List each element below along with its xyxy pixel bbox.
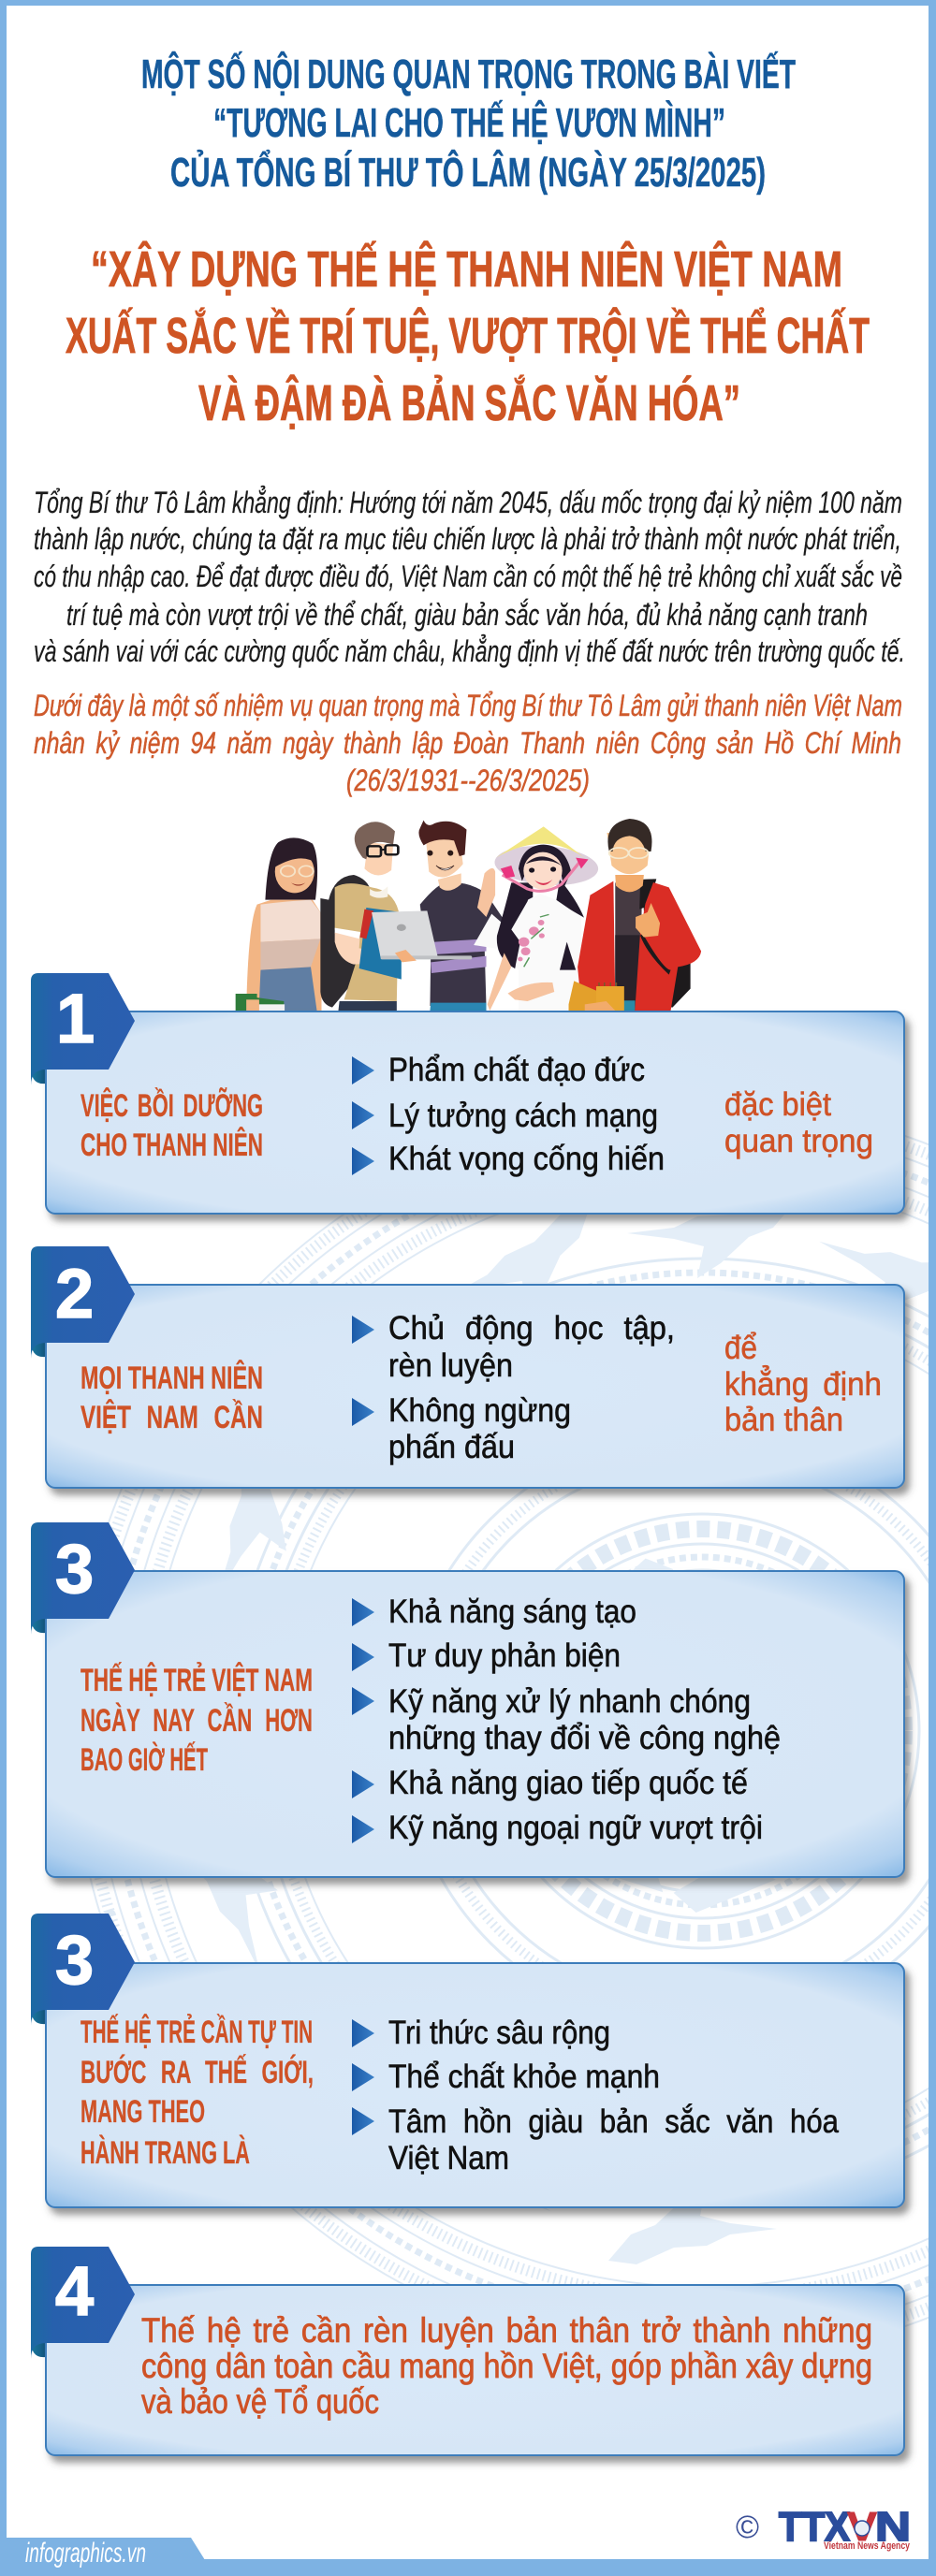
text block: orange italic lead-in: (26/3/1931--26/3/2025): [346, 764, 590, 797]
footer: copyright and TTXVN logo: N: [875, 2504, 911, 2550]
right label: bản thân: [724, 1402, 843, 1438]
bullet list: Lý tưởng cách mạng: [388, 1098, 658, 1134]
ribbon curl: [31, 2331, 46, 2357]
right label: khẳng định: [724, 1365, 882, 1403]
bullet list: [352, 2015, 839, 2176]
text block: orange italic lead-in: [34, 689, 902, 797]
background: bronze drum pattern: [73, 1102, 936, 2360]
number: 4: [55, 2252, 94, 2330]
footer: copyright and TTXVN logo: ©: [736, 2510, 759, 2545]
bullet list: Việt Nam: [388, 2140, 509, 2176]
left label: [80, 2015, 314, 2171]
number: 2: [55, 1255, 94, 1332]
right label: [724, 1330, 882, 1438]
left label: CHO THANH NIÊN: [80, 1128, 263, 1163]
footer: copyright and TTXVN logo: Vietnam News Agency: [824, 2540, 911, 2552]
bullet list: Khát vọng cống hiến: [388, 1141, 665, 1177]
heading: main quote: [66, 240, 870, 431]
panel box: [46, 1011, 904, 1214]
bullet list: rèn luyện: [388, 1347, 513, 1384]
number tab: [31, 973, 135, 1085]
bullet list: [352, 1594, 781, 1846]
bullet list: Kỹ năng ngoại ngữ vượt trội: [388, 1810, 763, 1846]
bullet list: Phẩm chất đạo đức: [388, 1052, 645, 1088]
panel 5: [31, 2247, 904, 2455]
left label: THẾ HỆ TRẺ CẦN TỰ TIN: [80, 2015, 313, 2050]
ribbon curl: [31, 1607, 46, 1633]
conclusion text: Thế hệ trẻ cần rèn luyện bản thân trở thành những: [141, 2311, 872, 2350]
person 2: [320, 822, 402, 1011]
number tab: [31, 2247, 135, 2359]
bullet list: Tri thức sâu rộng: [388, 2015, 610, 2051]
panel 2: [31, 1246, 904, 1488]
left label: MANG THEO: [80, 2094, 205, 2130]
laptop: [372, 910, 472, 962]
person 4: [474, 826, 600, 1011]
number tab: [31, 1522, 135, 1635]
bullet list: [352, 1310, 675, 1465]
number: 3: [55, 1921, 94, 1999]
left label: [80, 1663, 313, 1778]
bullet list: [352, 1052, 665, 1177]
panel 1: [31, 973, 904, 1214]
number: 3: [55, 1530, 94, 1608]
title: article summary: [141, 50, 796, 196]
footer: copyright and TTXVN logo: [736, 2504, 911, 2552]
right label: đặc biệt: [724, 1086, 831, 1123]
panel box: [46, 1571, 904, 1877]
left label: MỌI THANH NIÊN: [80, 1361, 263, 1396]
bullet list: Khả năng sáng tạo: [388, 1594, 636, 1630]
bullet list: phấn đấu: [388, 1429, 515, 1465]
left label: VIỆC BỒI DƯỠNG: [80, 1088, 263, 1124]
right label: quan trọng: [724, 1123, 873, 1159]
bullet list: Thể chất khỏe mạnh: [388, 2059, 660, 2095]
panel box: [46, 1285, 904, 1488]
illustration: five young people: [236, 819, 701, 1011]
ribbon curl: [31, 1998, 46, 2024]
left label: NGÀY NAY CẦN HƠN: [80, 1703, 313, 1739]
ribbon curl: [31, 1331, 46, 1357]
right label: [724, 1086, 873, 1159]
person 5: [569, 819, 701, 1011]
left label: BAO GIỜ HẾT: [80, 1742, 208, 1778]
left label: HÀNH TRANG LÀ: [80, 2135, 250, 2171]
bullet list: Chủ động học tập,: [388, 1310, 675, 1346]
left label: [80, 1088, 263, 1163]
footer: copyright and TTXVN logo: V: [847, 2504, 878, 2550]
left label: BƯỚC RA THẾ GIỚI,: [80, 2055, 314, 2090]
conclusion text: [141, 2311, 872, 2421]
panel box: [46, 1963, 904, 2207]
conclusion text: và bảo vệ Tổ quốc: [141, 2382, 379, 2421]
bullet list: Khả năng giao tiếp quốc tế: [388, 1765, 748, 1801]
panel box: [46, 2285, 904, 2455]
number tab: [31, 1914, 135, 2026]
number tab: [31, 1246, 135, 1359]
person 3: [418, 821, 505, 1011]
number: 1: [56, 980, 95, 1057]
panel 4: [31, 1914, 904, 2207]
text block: introduction: [34, 486, 905, 668]
bullet list: Tư duy phản biện: [388, 1637, 621, 1674]
ribbon curl: [31, 1057, 46, 1084]
panel 3: [31, 1522, 904, 1877]
left label: VIỆT NAM CẦN: [80, 1400, 263, 1435]
left label: [80, 1361, 263, 1435]
footer: copyright and TTXVN logo: TTX: [779, 2504, 850, 2550]
left label: THẾ HỆ TRẺ VIỆT NAM: [80, 1663, 313, 1698]
right label: để: [724, 1330, 757, 1366]
person 1: [236, 837, 321, 1011]
bullet list: Tâm hồn giàu bản sắc văn hóa: [388, 2103, 839, 2140]
bullet list: những thay đổi về công nghệ: [388, 1720, 781, 1756]
bullet list: Không ngừng: [388, 1392, 571, 1429]
bullet list: Kỹ năng xử lý nhanh chóng: [388, 1683, 751, 1720]
footer: website: infographics.vn: [25, 2538, 146, 2569]
